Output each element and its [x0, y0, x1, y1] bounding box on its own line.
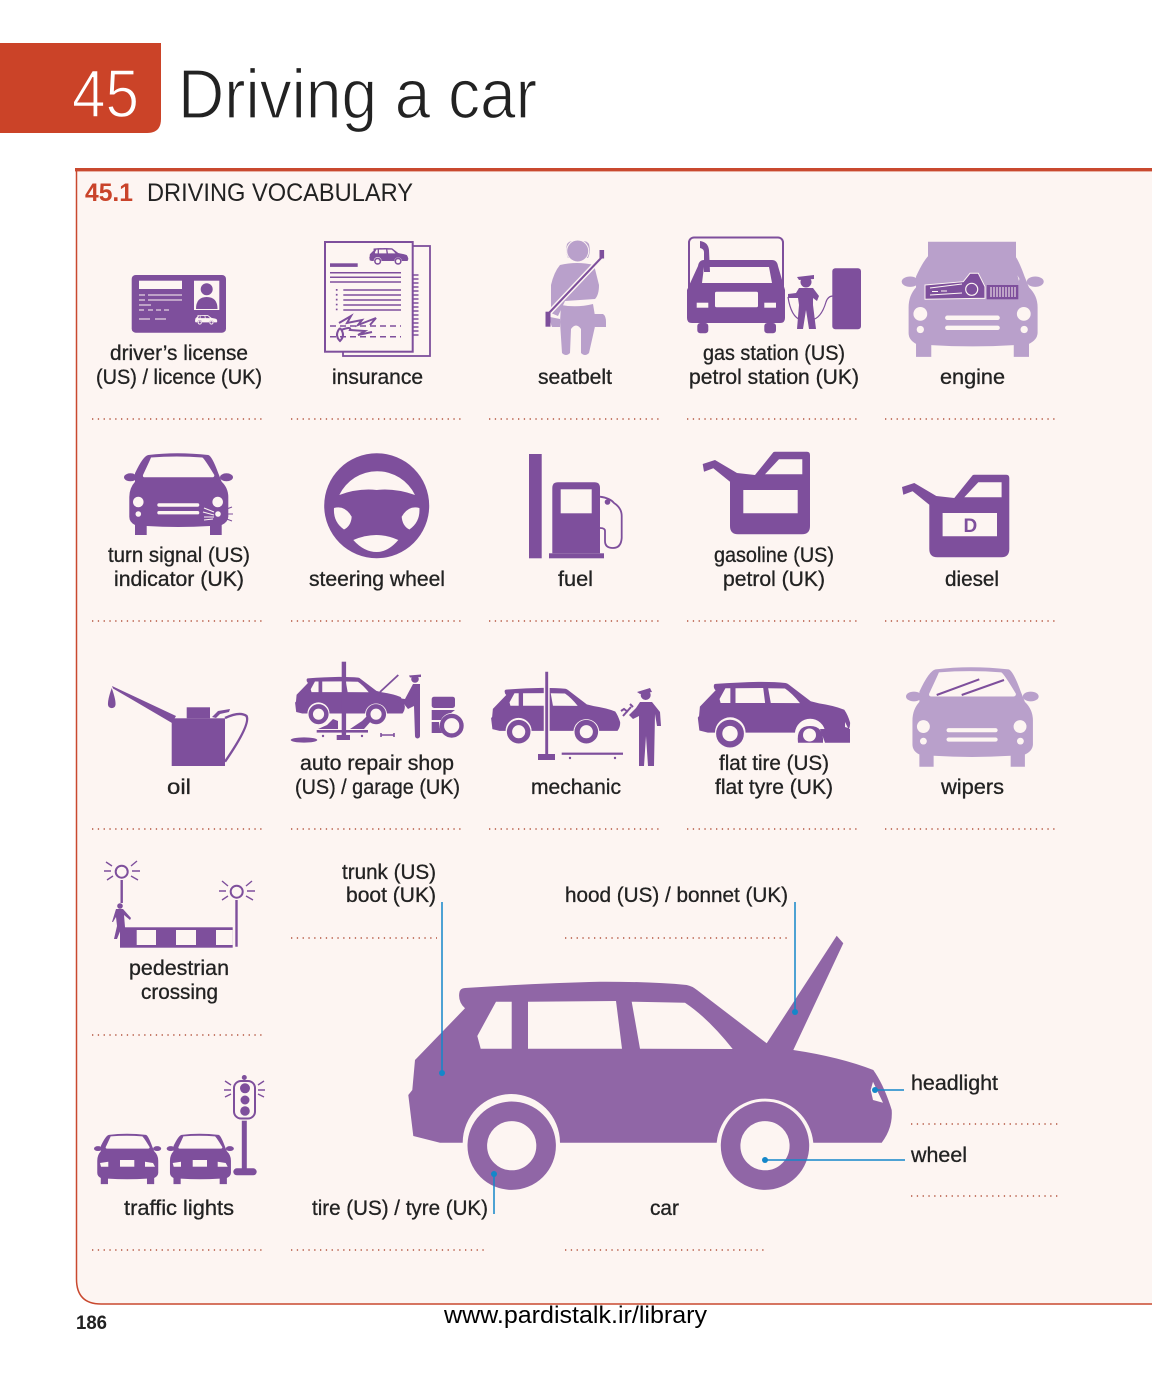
diagram: car parts: [291, 861, 1059, 1250]
answer line: [291, 620, 465, 622]
callout: hood: [565, 884, 798, 1015]
callout: tire: tire (US) / tyre (UK): [312, 1197, 488, 1220]
label: (US) / garage (UK): [295, 776, 460, 799]
icon: oil can: [108, 686, 247, 766]
callout: trunk: [291, 861, 445, 1076]
answer line: [92, 1034, 266, 1036]
caption: car: car: [650, 1197, 679, 1220]
label: turn signal (US): [108, 544, 250, 567]
section heading: 45.1: [85, 179, 133, 207]
panel: driving vocabulary: [75, 168, 1152, 1304]
label: auto repair shop: [300, 752, 454, 775]
title: Driving a car: [178, 55, 537, 133]
item: turn signal: [92, 453, 266, 621]
answer line: [885, 620, 1059, 622]
item: engine: [885, 242, 1059, 419]
label: traffic lights: [124, 1197, 234, 1220]
callout: trunk: boot (UK): [346, 884, 436, 907]
answer line: [291, 828, 465, 830]
answer line: [92, 828, 266, 830]
item: pedestrian crossing: [92, 861, 266, 1035]
label: [295, 752, 460, 799]
icon: car with open hood and engine: [902, 242, 1044, 357]
item: gas station: [687, 238, 861, 419]
icon: car with flat tire: [698, 682, 850, 744]
label: driver’s license: [110, 342, 248, 365]
item: flat tire: [687, 682, 861, 829]
item: auto repair shop: [291, 662, 465, 829]
item: steering wheel: [291, 453, 465, 621]
label: petrol station (UK): [689, 366, 859, 389]
icon: insurance documents: [325, 242, 430, 356]
label: [96, 342, 262, 389]
label: seatbelt: [538, 366, 612, 389]
label: indicator (UK): [114, 568, 244, 591]
callout: wheel: wheel: [910, 1144, 967, 1167]
label: petrol (UK): [723, 568, 825, 591]
answer line: [687, 620, 861, 622]
label: flat tyre (UK): [715, 776, 833, 799]
label: (US) / licence (UK): [96, 366, 262, 389]
item: diesel: [885, 475, 1059, 621]
label: insurance: [332, 366, 423, 389]
source url: www.pardistalk.ir/library: [443, 1302, 707, 1329]
label: gas station (US): [703, 342, 845, 365]
label: pedestrian: [129, 957, 229, 980]
label: steering wheel: [309, 568, 445, 591]
callout: hood: hood (US) / bonnet (UK): [565, 884, 788, 907]
icon: car with wipers: [906, 667, 1039, 767]
callout: wheel: [762, 1144, 1059, 1196]
icon: two cars at a traffic light: [94, 1075, 265, 1184]
label: [108, 544, 250, 591]
item: traffic lights: [92, 1075, 266, 1250]
icon: person with seatbelt: [546, 240, 606, 355]
answer line: [885, 418, 1059, 420]
section heading: DRIVING VOCABULARY: [147, 179, 413, 207]
item: oil: [92, 686, 266, 829]
label: gasoline (US): [714, 544, 834, 567]
item: seatbelt: [489, 240, 663, 419]
icon: zebra crossing with beacons: [104, 861, 255, 948]
label: [714, 544, 834, 591]
answer line: [92, 418, 266, 420]
label: flat tire (US): [719, 752, 829, 775]
icon: truck, attendant and pump: [687, 238, 861, 333]
answer line: [489, 828, 663, 830]
answer line: [489, 620, 663, 622]
callout: tire: [291, 1171, 497, 1250]
label: crossing: [141, 981, 218, 1004]
answer line: [291, 418, 465, 420]
answer line: [489, 418, 663, 420]
answer line: [687, 828, 861, 830]
icon: car on lift with mechanic and tires: [291, 662, 462, 743]
label: [129, 957, 229, 1004]
icon: diesel can: D: [964, 516, 977, 537]
item: insurance: [291, 242, 465, 419]
label: [715, 752, 833, 799]
label: diesel: [945, 568, 999, 591]
label: [689, 342, 859, 389]
icon: diesel can: [902, 475, 1009, 557]
answer line: [92, 620, 266, 622]
item: wipers: [885, 667, 1059, 829]
answer line: [687, 418, 861, 420]
page number: 186: [76, 1313, 107, 1334]
label: engine: [940, 366, 1005, 389]
icon: steering wheel: [324, 453, 429, 558]
item: gasoline: [687, 452, 861, 621]
callout: headlight: headlight: [911, 1072, 998, 1095]
label: fuel: [558, 568, 593, 591]
illustration: car side view with open hood: [408, 936, 892, 1180]
label: mechanic: [531, 776, 621, 799]
icon: fuel pump: [529, 454, 622, 558]
label: oil: [167, 776, 191, 799]
icon: gasoline can: [703, 452, 810, 534]
header: chapter number block: 45: [72, 56, 139, 132]
item: fuel: [489, 454, 663, 621]
answer line: [885, 828, 1059, 830]
icon: license card: [132, 275, 226, 333]
icon: car on lift with mechanic: [491, 671, 661, 766]
item: driver's license: [92, 275, 266, 419]
header: chapter number block: [0, 43, 161, 133]
callout: headlight: [872, 1072, 1059, 1124]
label: wipers: [940, 776, 1004, 799]
icon: car with flashing indicator: [124, 453, 233, 535]
item: mechanic: [489, 671, 663, 829]
callout: trunk: trunk (US): [342, 861, 436, 884]
answer line: [92, 1249, 266, 1251]
